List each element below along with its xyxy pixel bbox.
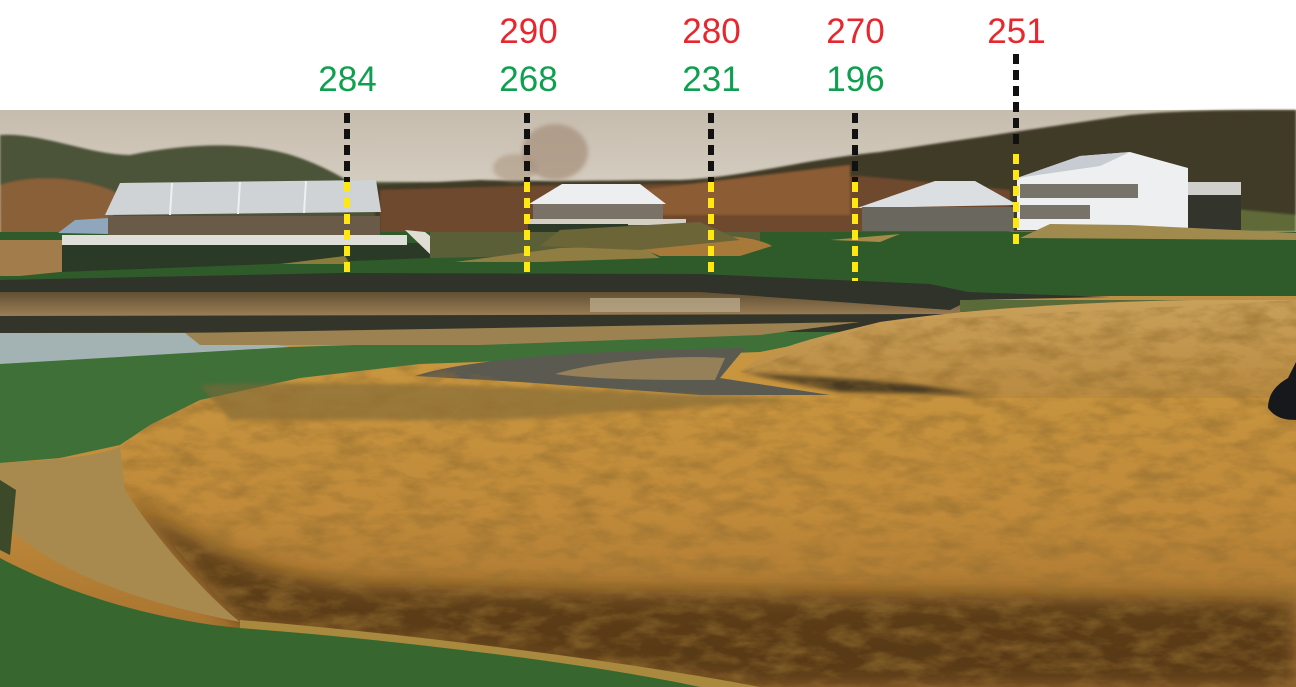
far rough strip (185, 322, 860, 345)
left rough edge (0, 447, 240, 622)
distance marker 270 / 196: 270 (826, 12, 885, 51)
distance marker 284: 284 (318, 60, 377, 99)
sky (0, 110, 1296, 240)
ground behind the wall (0, 232, 1296, 296)
upper fescue bank (740, 300, 1296, 398)
near fairway (0, 558, 745, 687)
distance marker 270 / 196: 196 (826, 60, 885, 99)
near water (0, 333, 290, 364)
bare tree (493, 124, 588, 182)
golden fescue foreground (115, 383, 1296, 687)
tent: right pavilion (857, 181, 1018, 231)
distant wooded hills (0, 110, 1296, 250)
grass texture (100, 300, 1296, 687)
lower wall (0, 314, 960, 333)
right fairway strip (960, 300, 1296, 312)
distance marker 280 / 231 (682, 12, 741, 277)
tent: middle pavilion (528, 184, 686, 242)
cart path (415, 348, 830, 395)
distance marker 251: 251 (987, 12, 1046, 51)
parked cart (1268, 362, 1296, 420)
bulkhead wall (0, 273, 1110, 310)
golden base of the photo (0, 230, 1296, 687)
pond (0, 290, 960, 318)
distance marker 290 / 268: 290 (499, 12, 558, 51)
distance marker 270 / 196 (826, 12, 885, 281)
distance marker 290 / 268: 268 (499, 60, 558, 99)
tent: left pavilion (58, 180, 455, 273)
distance marker 290 / 268 (499, 12, 558, 277)
fairway and green slopes (0, 222, 1296, 296)
tee-side fairway (0, 332, 860, 463)
distance marker 280 / 231: 231 (682, 60, 741, 99)
two-storey clubhouse (1017, 152, 1241, 230)
distance marker 280 / 231: 280 (682, 12, 741, 51)
